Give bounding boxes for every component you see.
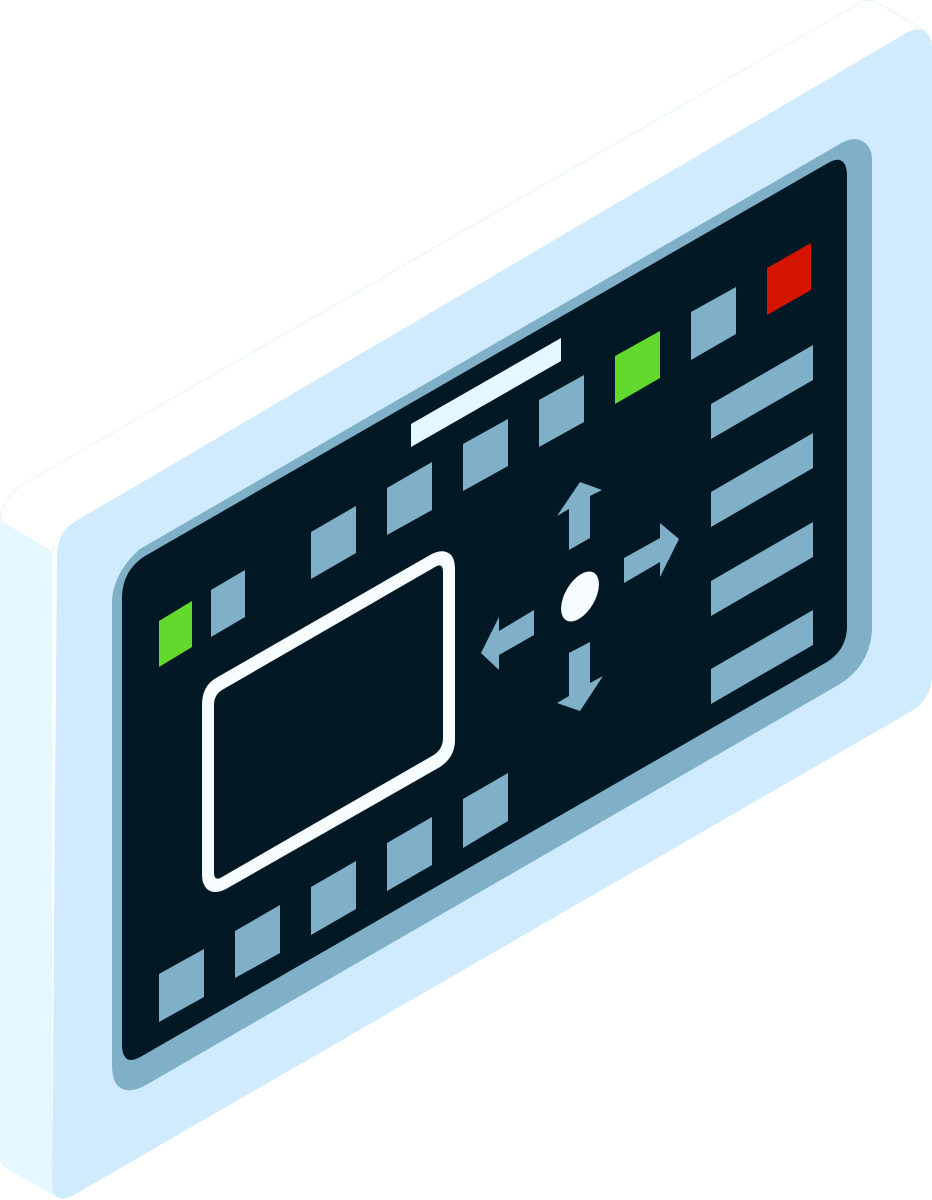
indicator: green — [615, 331, 660, 404]
control panel — [112, 139, 872, 1090]
panel dark face — [122, 160, 847, 1060]
button: small blue — [211, 570, 245, 637]
center button — [553, 565, 607, 628]
wide buttons on right — [711, 345, 813, 704]
panel bezel — [112, 139, 872, 1090]
bottom button row — [159, 773, 508, 1022]
indicator: green small — [159, 601, 192, 667]
arrow down — [557, 642, 603, 711]
directional pad — [481, 482, 679, 711]
arrow up — [557, 482, 602, 550]
arrow right — [624, 523, 679, 583]
casing top face — [0, 0, 924, 552]
display screen frame — [202, 551, 455, 892]
status bar — [411, 338, 561, 447]
top button row — [311, 287, 736, 579]
indicator: red — [767, 243, 811, 315]
arrow left — [481, 610, 534, 670]
casing left side face — [0, 522, 58, 1198]
